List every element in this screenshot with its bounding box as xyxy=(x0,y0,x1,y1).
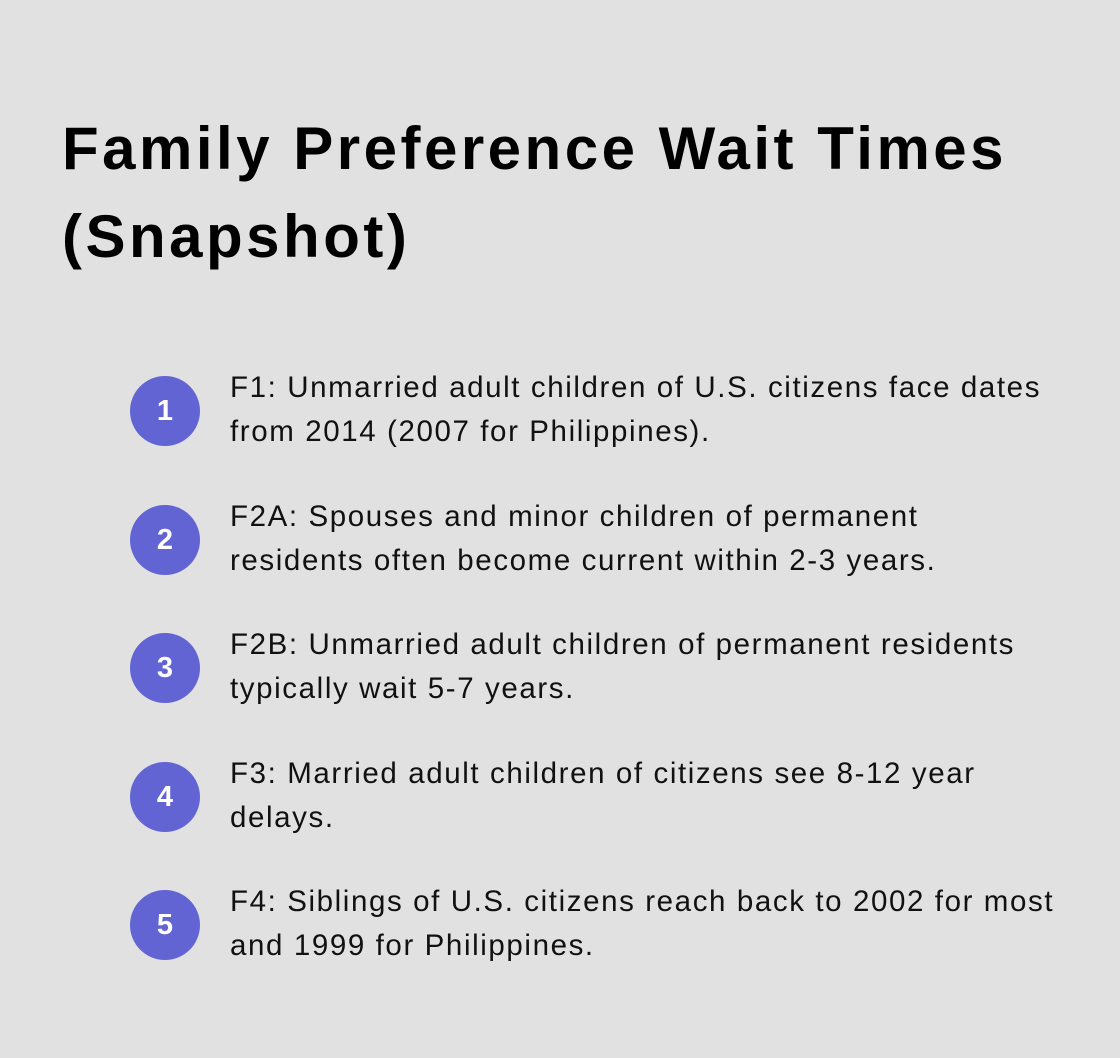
text 4: F3: Married adult children of citizens see 8-12 year xyxy=(230,757,976,790)
badge 1: 1 xyxy=(157,395,173,427)
text 4 xyxy=(230,757,976,834)
text 2: residents often become current within 2-3 years. xyxy=(230,544,936,577)
title: Family Preference Wait Times xyxy=(62,115,1007,182)
badge 3 xyxy=(130,633,200,703)
item 4 xyxy=(130,757,976,834)
text 5: and 1999 for Philippines. xyxy=(230,929,595,962)
text 5 xyxy=(230,885,1054,962)
badge 4 xyxy=(130,762,200,832)
badge 4: 4 xyxy=(157,781,173,813)
title xyxy=(62,115,1007,270)
text 3: typically wait 5-7 years. xyxy=(230,672,575,705)
text 2 xyxy=(230,500,936,577)
text 1: from 2014 (2007 for Philippines). xyxy=(230,415,711,448)
item 2 xyxy=(130,500,936,577)
text 3 xyxy=(230,628,1015,705)
badge 3: 3 xyxy=(157,652,173,684)
text 3: F2B: Unmarried adult children of permanent residents xyxy=(230,628,1015,661)
text 4: delays. xyxy=(230,801,335,834)
badge 2 xyxy=(130,505,200,575)
badge 1 xyxy=(130,376,200,446)
item 1 xyxy=(130,371,1041,448)
badge 5 xyxy=(130,890,200,960)
text 5: F4: Siblings of U.S. citizens reach back to 2002 for most xyxy=(230,885,1054,918)
item 5 xyxy=(130,885,1054,962)
text 2: F2A: Spouses and minor children of permanent xyxy=(230,500,919,533)
badge 2: 2 xyxy=(157,524,173,556)
text 1 xyxy=(230,371,1041,448)
item 3 xyxy=(130,628,1015,705)
badge 5: 5 xyxy=(157,909,173,941)
text 1: F1: Unmarried adult children of U.S. citizens face dates xyxy=(230,371,1041,404)
title: (Snapshot) xyxy=(62,203,410,270)
